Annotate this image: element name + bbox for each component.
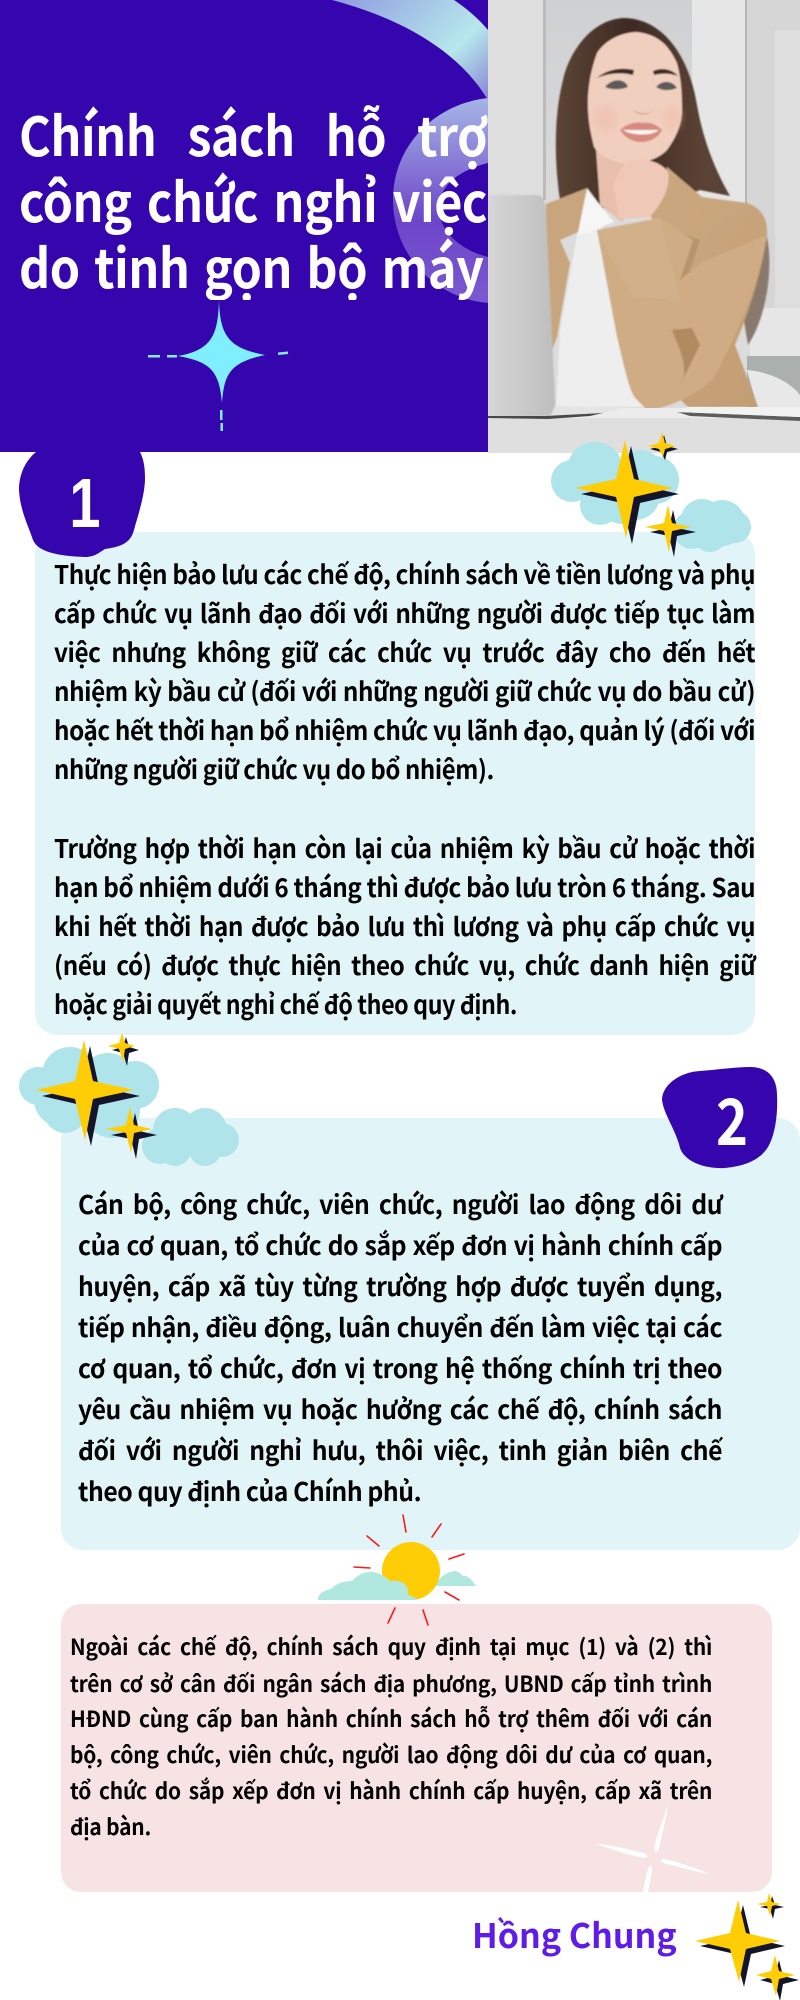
- panel 1 text: hoặc giải quyết nghỉ chế độ theo quy định.: [54, 985, 517, 1022]
- panel 3 text: bộ, công chức, viên chức, người lao động dôi dư của cơ quan,: [70, 1738, 712, 1770]
- title: công chức nghỉ việc: [19, 159, 487, 238]
- panel 1 background: [35, 532, 755, 1035]
- title: [19, 100, 488, 300]
- brows and eyes: [597, 69, 678, 78]
- panel 3 text: HĐND cùng cấp ban hành chính sách hỗ trợ thêm đối với cán: [70, 1702, 712, 1734]
- sleeve: [597, 218, 767, 410]
- panel 2 text: đối với người nghỉ hưu, thôi việc, tinh giản biên chế: [78, 1431, 722, 1468]
- panel 1 text: khi hết thời hạn được bảo lưu thì lương và phụ cấp chức vụ: [54, 907, 755, 944]
- photo: woman at laptop: [488, 0, 800, 453]
- jacket left: [546, 188, 587, 350]
- icon: cyan sparkle: [148, 300, 288, 431]
- panel 2 text: Cán bộ, công chức, viên chức, người lao động dôi dư: [78, 1185, 722, 1222]
- mouth: [620, 123, 662, 142]
- face: [588, 32, 682, 164]
- panel 2 text: huyện, cấp xã tùy từng trường hợp được tuyển dụng,: [78, 1267, 722, 1304]
- number 2: 2: [716, 1072, 748, 1164]
- nose shadow: [633, 108, 654, 115]
- neck: [596, 150, 650, 222]
- panel 1 text: hạn bổ nhiệm dưới 6 tháng thì được bảo lưu tròn 6 tháng. Sau: [54, 868, 755, 905]
- author credit: Hồng Chung: [472, 1909, 677, 1958]
- panel 2 background: [61, 1118, 800, 1550]
- panel 1: [35, 532, 756, 1035]
- panel 1 text: Trường hợp thời hạn còn lại của nhiệm kỳ bầu cử hoặc thời: [54, 829, 755, 866]
- panel 3 text: tổ chức do sắp xếp đơn vị hành chính cấp huyện, cấp xã trên: [70, 1774, 712, 1806]
- panel 1 text: Thực hiện bảo lưu các chế độ, chính sách về tiền lương và phụ: [54, 555, 755, 592]
- icon: white sparkle: [598, 1804, 710, 1892]
- panel 1 text: nhiệm kỳ bầu cử (đối với những người giữ chức vụ do bầu cử): [54, 672, 755, 709]
- shirt: [556, 190, 650, 407]
- panel 3: [61, 1604, 772, 1892]
- laptop: [488, 195, 555, 417]
- panel 3 text: Ngoài các chế độ, chính sách quy định tại mục (1) và (2) thì: [70, 1630, 712, 1662]
- chair: [747, 370, 800, 410]
- panel 1 text: những người giữ chức vụ do bổ nhiệm).: [54, 750, 494, 787]
- panel 3 background: [61, 1604, 772, 1892]
- panel 2: [61, 1118, 800, 1550]
- panel 2 text: theo quy định của Chính phủ.: [78, 1472, 421, 1509]
- panel 2 text: tiếp nhận, điều động, luân chuyển đến làm việc tại các: [78, 1308, 722, 1345]
- badge 2: [662, 1067, 778, 1168]
- panel 1 text: hoặc hết thời hạn bổ nhiệm chức vụ lãnh đạo, quản lý (đối với: [54, 711, 755, 748]
- panel 1 text: [54, 555, 756, 1022]
- panel 2 text: [78, 1185, 724, 1509]
- decoration: clouds and stars top right: [551, 432, 751, 557]
- badge 1: [19, 452, 145, 557]
- desk: [488, 417, 800, 453]
- panel 2 text: yêu cầu nhiệm vụ hoặc hưởng các chế độ, chính sách: [78, 1390, 722, 1427]
- panel 1 text: cấp chức vụ lãnh đạo đối với những người được tiếp tục làm: [54, 594, 755, 631]
- panel 2 text: của cơ quan, tổ chức do sắp xếp đơn vị hành chính cấp: [78, 1226, 722, 1263]
- panel 3 text: trên cơ sở cân đối ngân sách địa phương, UBND cấp tỉnh trình: [70, 1667, 712, 1699]
- panel 3 text: địa bàn.: [70, 1810, 151, 1842]
- number 1: 1: [69, 464, 101, 542]
- decoration: stars bottom right: [695, 1893, 799, 2000]
- panel 3 text: [70, 1630, 712, 1842]
- header banner: [0, 0, 800, 453]
- hand: [613, 159, 669, 219]
- panel 2 text: cơ quan, tổ chức, đơn vị trong hệ thống chính trị theo: [78, 1349, 722, 1386]
- lapel: [650, 167, 702, 232]
- panel 1 text: việc nhưng không giữ các chức vụ trước đây cho đến hết: [54, 633, 755, 670]
- decoration: clouds and stars left: [19, 1033, 239, 1166]
- icon: sun with clouds: [318, 1514, 476, 1626]
- jacket right body: [660, 167, 767, 407]
- header background with rings: [0, 0, 488, 452]
- hair: [556, 18, 730, 215]
- panel 1 text: (nếu có) được thực hiện theo chức vụ, chức danh hiện giữ: [54, 946, 755, 983]
